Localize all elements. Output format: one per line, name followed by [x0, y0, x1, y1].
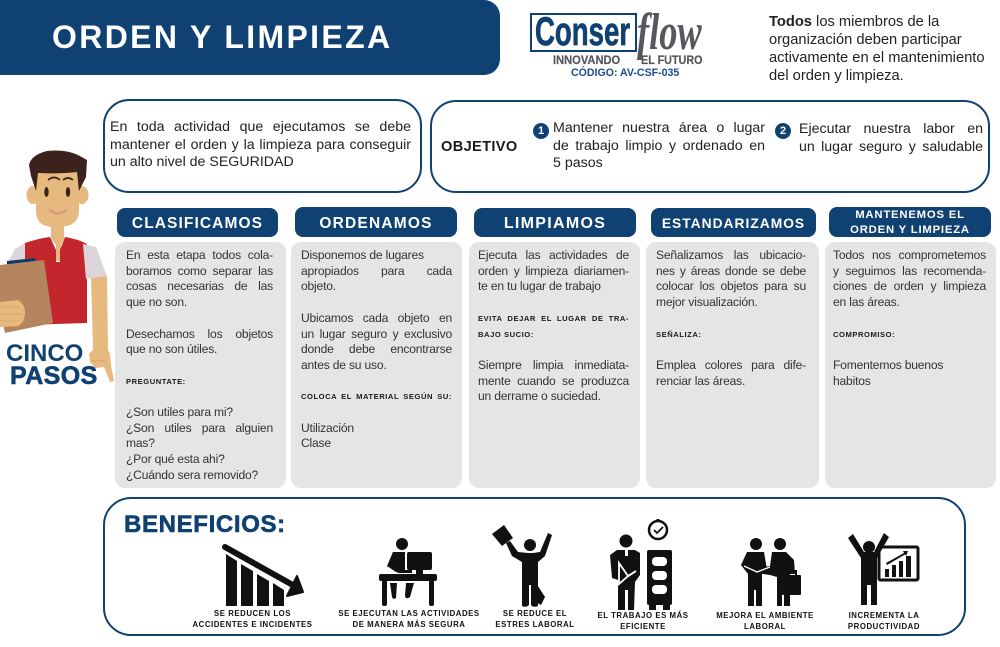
number badge 2 [775, 123, 791, 139]
label: actividades: DE MANERA MÁS SEGURA [353, 620, 465, 629]
step text: SEÑALIZA: [656, 330, 701, 338]
step text [126, 248, 273, 482]
step header: mantenemos: ORDEN Y LIMPIEZA [850, 224, 970, 236]
panel: safety statement [103, 99, 422, 193]
step header: clasificamos: CLASIFICAMOS [132, 215, 263, 232]
number badge 1: 1 [538, 125, 544, 137]
label: accidentes [192, 609, 313, 629]
label: ambiente: MEJORA EL AMBIENTE [716, 611, 814, 620]
step text: renciar las áreas. [656, 374, 745, 388]
objective 2 text [799, 121, 983, 155]
objective 1 text: 5 pasos [553, 155, 603, 171]
label: eficiente [597, 610, 689, 631]
step text: antes de su uso. [301, 358, 387, 372]
step text: boramos como separar las [126, 264, 273, 278]
heading: cinco pasos: PASOS [10, 362, 98, 390]
logo: Conserflow: CÓDIGO: AV-CSF-035 [571, 67, 679, 79]
step text: ¿Por qué esta ahi? [126, 452, 225, 466]
heading: cinco pasos: CINCO [6, 340, 83, 367]
label: actividades [338, 609, 480, 629]
step text: ¿Cuándo sera removido? [126, 468, 258, 482]
step text: ciones de orden y limpieza [833, 279, 986, 293]
step text: un lugar seguro y exclusivo [301, 326, 452, 340]
step text: te en tu lugar de trabajo [478, 279, 601, 293]
step text: Desechamos los objetos [126, 326, 273, 340]
panel: mantenemos [825, 242, 996, 488]
step text: Todos nos comprometemos [833, 248, 986, 262]
label: accidentes: SE REDUCEN LOS [214, 609, 291, 618]
step text: ¿Son utiles para mi? [126, 405, 233, 419]
step text: Clase [301, 436, 331, 450]
heading: beneficios: BENEFICIOS: [124, 511, 286, 538]
number badge 2: 2 [780, 125, 786, 137]
panel: limpiamos [469, 242, 640, 488]
label: estres: ESTRES LABORAL [495, 620, 575, 629]
panel: objective [430, 100, 990, 193]
label: ambiente [716, 611, 814, 631]
logo: Conserflow: flow [637, 4, 702, 61]
step text: que no son útiles. [126, 342, 217, 356]
step text: mente cuando se produzca [478, 374, 629, 388]
step text: PREGUNTATE: [126, 377, 186, 386]
step text [656, 248, 806, 388]
step text: habitos [833, 374, 871, 388]
step text: un derrame o suciedad. [478, 389, 601, 403]
icon: worker, clock and cabinet [610, 519, 672, 610]
step header: limpiamos: LIMPIAMOS [504, 215, 606, 232]
label: accidentes: ACCIDENTES E INCIDENTES [192, 620, 313, 629]
label: productividad [848, 611, 920, 631]
statement text: mantener el orden y la limpieza para conseguir [110, 137, 411, 153]
panel: beneficios [103, 497, 966, 636]
step text: mejor visualización. [656, 295, 758, 309]
logo: Conserflow [530, 4, 703, 79]
step text: COLOCA EL MATERIAL SEGÚN SU: [301, 392, 452, 401]
character illustration [0, 150, 114, 382]
logo: Conserflow: Conser [535, 10, 630, 54]
step text: donde debe encontrarse [301, 342, 452, 356]
step text: que no son. [126, 295, 187, 309]
icon: falling bars and arrow [222, 544, 304, 606]
step text [833, 248, 986, 388]
step text: Disponemos de lugares [301, 248, 424, 262]
objective 1 text: Mantener nuestra área o lugar [553, 120, 765, 136]
step text: Ubicamos cada objeto en [301, 311, 452, 325]
label: productividad: PRODUCTIVIDAD [848, 622, 920, 631]
step text: Señalizamos las ubicacio- [656, 248, 806, 262]
icon: relieved person with folder [492, 525, 552, 607]
statement text: un alto nivel de SEGURIDAD [110, 154, 294, 170]
label: actividades: SE EJECUTAN LAS ACTIVIDADES [338, 609, 480, 618]
step header: mantenemos: MANTENEMOS EL [855, 209, 965, 221]
heading: cinco pasos [6, 340, 98, 390]
panel: estandarizamos [646, 242, 819, 488]
label: estres [495, 609, 575, 629]
step header: limpiamos [474, 208, 636, 237]
statement text [110, 119, 411, 170]
step text: Siempre limpia inmediata- [478, 358, 629, 372]
title banner: ORDEN Y LIMPIEZA [52, 19, 392, 55]
step text: BAJO SUCIO: [478, 330, 534, 338]
panel: clasificamos [115, 242, 286, 488]
step text: objeto. [301, 279, 336, 293]
panel: ordenamos [291, 242, 462, 488]
step text: colocar los objetos para su [656, 279, 806, 293]
label: eficiente: EFICIENTE [620, 622, 666, 631]
step text: orden y limpieza diariamen- [478, 264, 629, 278]
label: eficiente: EL TRABAJO ES MÁS [597, 611, 689, 620]
title banner [0, 0, 500, 75]
step header: mantenemos [829, 207, 991, 237]
logo: Conserflow: EL FUTURO [641, 54, 703, 67]
step text [478, 248, 630, 403]
objective 1 text: de trabajo limpio y ordenado en [553, 138, 765, 154]
step text: Utilización [301, 421, 354, 435]
step text: y seguimos las recomenda- [833, 264, 986, 278]
step text: mas? [126, 436, 155, 450]
objective 2 text: un lugar seguro y saludable [799, 139, 983, 155]
step header: estandarizamos: ESTANDARIZAMOS [662, 216, 805, 231]
label: ambiente: LABORAL [744, 622, 786, 631]
step text: EVITA DEJAR EL LUGAR DE TRA- [478, 314, 629, 323]
intro note [769, 14, 985, 84]
step text [301, 248, 452, 450]
intro note: activamente en el mantenimiento [769, 50, 985, 66]
intro note: del orden y limpieza. [769, 68, 904, 84]
step text: COMPROMISO: [833, 330, 895, 338]
label: productividad: INCREMENTA LA [849, 611, 919, 620]
step header: estandarizamos [651, 208, 816, 237]
objective heading: OBJETIVO [441, 139, 518, 155]
step header: clasificamos [117, 208, 278, 237]
step header: ordenamos [295, 207, 457, 237]
icon: two colleagues with briefcase [741, 538, 801, 606]
step text: apropiados para cada [301, 264, 452, 278]
statement text: En toda actividad que ejecutamos se debe [110, 119, 411, 135]
step text: En esta etapa todos cola- [126, 248, 273, 262]
step header: ordenamos: ORDENAMOS [319, 215, 433, 232]
intro note: Todos los miembros de la [769, 14, 939, 30]
step text: ¿Son utiles para alguien [126, 421, 273, 435]
objective 2 text: Ejecutar nuestra labor en [799, 121, 983, 137]
step text: nes y áreas donde se debe [656, 264, 806, 278]
step text: cosas necesarias de las [126, 279, 273, 293]
icon: cheering person with chart board [848, 533, 920, 605]
logo: Conserflow: INNOVANDO [553, 54, 620, 67]
number badge 1 [533, 123, 549, 139]
objective 1 text [553, 120, 765, 171]
step text: Fomentemos buenos [833, 358, 943, 372]
step text: en las áreas. [833, 295, 900, 309]
intro note: organización deben participar [769, 32, 962, 48]
step text: Ejecuta las actividades de [478, 248, 629, 262]
icon: person at desk [379, 538, 437, 606]
label: estres: SE REDUCE EL [503, 609, 567, 618]
step text: Emplea colores para dife- [656, 358, 806, 372]
